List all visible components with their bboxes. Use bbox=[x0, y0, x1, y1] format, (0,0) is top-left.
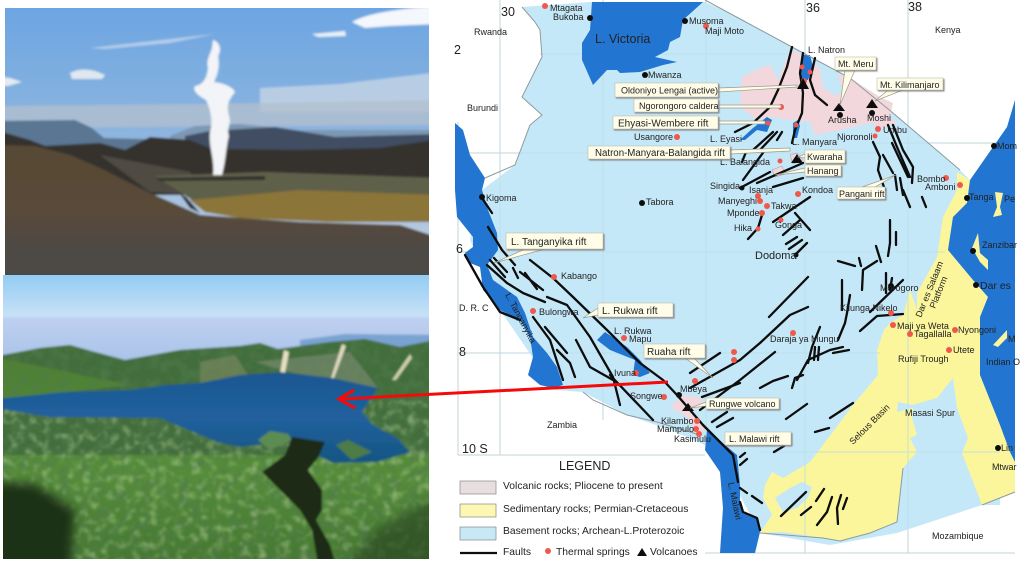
coordinate labels: 38 bbox=[908, 0, 922, 14]
legend: sedimentary rocks bbox=[460, 504, 688, 517]
place labels: Umbu bbox=[883, 125, 907, 135]
place labels: Bombo bbox=[917, 174, 946, 184]
place labels: Kilunga Nikelo bbox=[840, 303, 898, 313]
place labels: Burundi bbox=[467, 103, 498, 113]
place labels: Mom bbox=[997, 141, 1017, 151]
place labels: Takwa bbox=[771, 201, 797, 211]
place labels: Masasi Spur bbox=[905, 408, 955, 418]
place labels: M bbox=[1008, 334, 1016, 344]
place labels: L. Manyara bbox=[792, 137, 837, 147]
callout: Natron-Manyara-Balangida rift: Natron-Manyara-Balangida rift bbox=[595, 148, 725, 159]
callout: Rungwe volcano: Rungwe volcano bbox=[709, 399, 776, 409]
place labels: Moshi bbox=[867, 113, 891, 123]
place labels: Morogoro bbox=[880, 283, 919, 293]
place labels: L. Eyasi bbox=[710, 134, 742, 144]
legend: faults, thermal springs, volcanoes: Volcanoes bbox=[650, 547, 698, 558]
place labels: Kasimulu bbox=[674, 434, 711, 444]
place labels: Njoronoli bbox=[837, 132, 873, 142]
coordinate labels: 2 bbox=[454, 43, 461, 57]
place labels: Zanzibar bbox=[982, 240, 1017, 250]
place labels: Isanja bbox=[749, 185, 773, 195]
place labels: Bulongwa bbox=[539, 307, 579, 317]
place labels: Nyongoni bbox=[958, 325, 996, 335]
place labels: Tabora bbox=[646, 197, 674, 207]
place labels: Selous Basin bbox=[847, 402, 892, 446]
place labels: Musoma bbox=[689, 16, 724, 26]
map of Tanzania with rifts bbox=[454, 0, 1020, 564]
callout leaders bbox=[494, 70, 903, 408]
callout: Pangani rift: Pangani rift bbox=[839, 189, 885, 199]
place labels: L. Natron bbox=[808, 45, 845, 55]
callout: Mt. Meru bbox=[835, 57, 876, 70]
legend: volcanic rocks bbox=[460, 481, 663, 494]
basement rocks area bbox=[470, 2, 1000, 545]
faults bbox=[465, 47, 926, 530]
place labels: Pe bbox=[1004, 194, 1015, 204]
legend: faults, thermal springs, volcanoes bbox=[460, 547, 698, 558]
legend: basement rocks bbox=[460, 526, 684, 540]
map paper background bbox=[455, 0, 1015, 564]
photo: geothermal steam plume in volcanic landscape bbox=[0, 0, 440, 285]
callout: Ngorongoro caldera: Ngorongoro caldera bbox=[639, 101, 719, 111]
place labels: Kilambo bbox=[661, 416, 694, 426]
thermal springs bbox=[530, 3, 963, 437]
photo: crater lake surrounded by forest bbox=[0, 265, 440, 564]
place labels: Kenya bbox=[935, 25, 961, 35]
coordinate labels: 36 bbox=[806, 1, 820, 15]
arrow: from Rungwe volcano to crater lake photo bbox=[339, 382, 668, 408]
place labels: Mtwar bbox=[992, 462, 1017, 472]
place labels: Manyeghi bbox=[718, 196, 757, 206]
lakes bbox=[455, 2, 813, 553]
place labels: Gonga bbox=[775, 220, 802, 230]
callout: L. Tanganyika rift bbox=[506, 233, 603, 249]
Indian Ocean bbox=[948, 100, 1015, 462]
place labels: Platform bbox=[928, 275, 949, 310]
callout: Oldoniyo Lengai: Oldoniyo Lengai (active) bbox=[621, 86, 718, 96]
place labels: Mponde bbox=[727, 208, 760, 218]
international borders bbox=[485, 0, 1015, 541]
coordinate labels: 30 bbox=[501, 5, 515, 19]
coordinate grid on white land bbox=[458, 0, 1015, 553]
crater rim and forest land bbox=[0, 335, 440, 564]
place labels: Tanga bbox=[969, 192, 994, 202]
place labels: Ivuna bbox=[614, 368, 636, 378]
place labels: L. Tanganyika bbox=[503, 291, 538, 345]
place labels: L. Balangida bbox=[720, 157, 770, 167]
place labels: Mbeya bbox=[680, 384, 707, 394]
coordinate labels: 6 bbox=[456, 242, 463, 256]
Lake Victoria bbox=[582, 2, 703, 85]
Lake Natron bbox=[800, 55, 813, 80]
far ridges bbox=[169, 123, 429, 141]
yellow sedimentary rocks bbox=[760, 172, 1015, 541]
legend: sedimentary rocks: Sedimentary rocks; Permian-Cretaceous bbox=[503, 504, 688, 515]
callout: Ehyasi-Wembere rift: Ehyasi-Wembere rift bbox=[618, 118, 709, 130]
towns bbox=[479, 15, 1001, 451]
place labels: Arusha bbox=[828, 115, 857, 125]
callout: Ruaha rift: Ruaha rift bbox=[647, 347, 691, 358]
callout: Ruaha rift bbox=[644, 344, 705, 358]
place labels: Songwe bbox=[630, 391, 663, 401]
Lake Rukwa bbox=[597, 332, 650, 377]
legend: faults, thermal springs, volcanoes: Faults bbox=[503, 547, 531, 558]
volcanoes bbox=[682, 78, 878, 411]
place labels: Utete bbox=[953, 345, 975, 355]
legend: volcanic rocks: Volcanic rocks; Pliocene to present bbox=[503, 481, 663, 492]
place labels: Amboni bbox=[925, 182, 956, 192]
legend: faults, thermal springs, volcanoes: Thermal springs bbox=[556, 547, 630, 558]
place labels: Bukoba bbox=[553, 12, 584, 22]
place labels: Kondoa bbox=[802, 185, 833, 195]
place labels: Dodoma bbox=[755, 250, 797, 262]
place labels: Tagallalla bbox=[914, 329, 952, 339]
place labels: Dar es Salaam bbox=[914, 260, 945, 319]
place labels: Usangore bbox=[634, 132, 673, 142]
place labels: Maji ya Weta bbox=[897, 321, 949, 331]
callout: Oldoniyo Lengai bbox=[615, 83, 718, 97]
place labels: Singida bbox=[710, 181, 740, 191]
legend title: LEGEND bbox=[559, 459, 610, 473]
place labels: Rwanda bbox=[474, 27, 507, 37]
place labels: Mozambique bbox=[932, 531, 984, 541]
place labels: Mapu bbox=[629, 334, 652, 344]
callout: L. Rukwa rift bbox=[598, 303, 673, 317]
callout: Kwaraha bbox=[805, 150, 845, 163]
place labels: Maji Moto bbox=[705, 26, 744, 36]
Lake Eyasi bbox=[740, 117, 772, 140]
place labels: Dar es bbox=[980, 280, 1011, 292]
dark plant in the foreground bbox=[262, 437, 336, 564]
callout: L. Rukwa rift: L. Rukwa rift bbox=[602, 306, 658, 317]
callout: L. Malawi rift: L. Malawi rift bbox=[729, 434, 780, 444]
place labels: Zambia bbox=[547, 420, 577, 430]
coordinate labels: 10 S bbox=[462, 442, 488, 456]
volcanic rocks bbox=[740, 50, 897, 135]
Lake Tanganyika bbox=[455, 123, 563, 388]
callout: Hanang: Hanang bbox=[807, 166, 839, 176]
place labels: D. R. C bbox=[459, 303, 489, 313]
callout: Mt. Meru: Mt. Meru bbox=[838, 59, 874, 69]
callout: L. Tanganyika rift: L. Tanganyika rift bbox=[511, 237, 587, 248]
steam plume bbox=[194, 40, 235, 175]
coordinate labels bbox=[454, 0, 922, 456]
islands bbox=[993, 192, 1003, 217]
callout: Mt. Kilimanjaro: Mt. Kilimanjaro bbox=[880, 80, 940, 90]
faint grid over land bbox=[470, 2, 1000, 540]
callout: L. Malawi rift bbox=[725, 432, 791, 445]
Lake Manyara bbox=[793, 120, 800, 138]
place labels bbox=[459, 3, 1020, 541]
place labels: Hika bbox=[734, 223, 752, 233]
shaded foreground bbox=[0, 482, 75, 564]
place labels: L. Rukwa bbox=[614, 326, 652, 336]
place labels: Lin bbox=[1001, 443, 1013, 453]
place labels: Indian O bbox=[986, 357, 1020, 367]
place labels: Mampulo bbox=[657, 424, 694, 434]
crater lake bbox=[0, 372, 410, 463]
place labels: Mtagata bbox=[550, 3, 583, 13]
place labels: L. Victoria bbox=[595, 32, 650, 46]
place labels: Rufiji Trough bbox=[898, 354, 949, 364]
place labels: Kigoma bbox=[486, 193, 517, 203]
callout: Kwaraha: Kwaraha bbox=[807, 152, 843, 162]
legend bbox=[460, 459, 698, 558]
place labels: Mwanza bbox=[648, 70, 682, 80]
place labels: Kabango bbox=[561, 271, 597, 281]
legend: basement rocks: Basement rocks; Archean-L.Proterozoic bbox=[503, 526, 684, 537]
place labels: Daraja ya Mungu bbox=[770, 334, 839, 344]
coordinate labels: 8 bbox=[459, 345, 466, 359]
Lake Malawi bbox=[705, 430, 760, 553]
place labels: L. Malawi bbox=[726, 481, 744, 521]
